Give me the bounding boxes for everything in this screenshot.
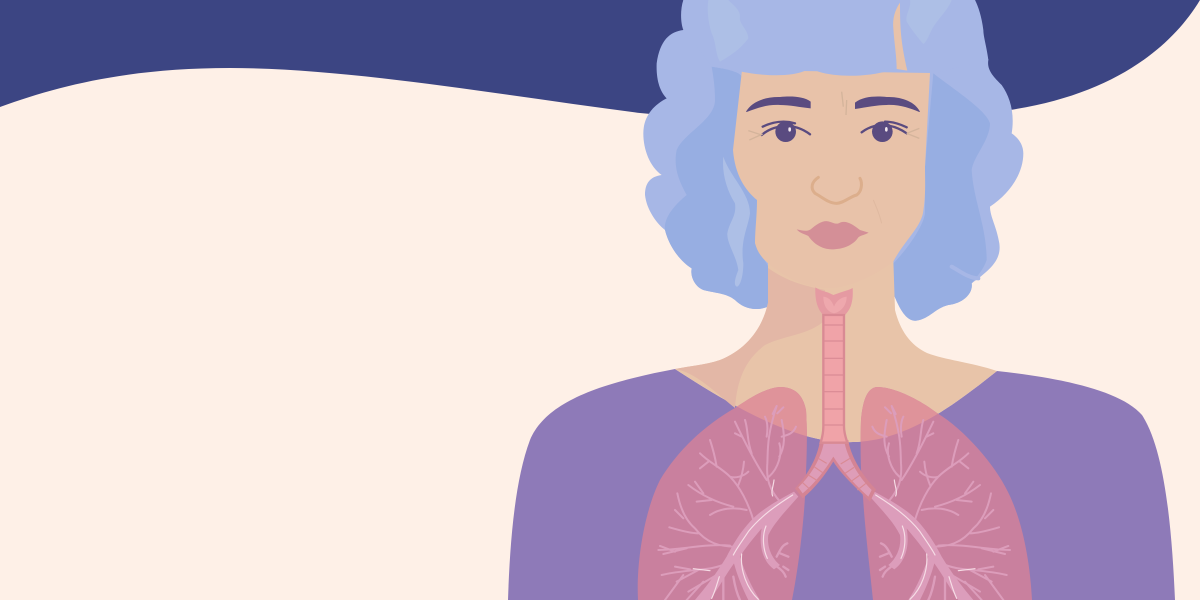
nose <box>812 177 861 203</box>
trachea and bronchi <box>795 287 876 502</box>
neck shadow <box>675 268 825 408</box>
larynx <box>815 287 853 315</box>
face <box>733 70 930 288</box>
hair: darker right wave <box>893 73 990 321</box>
lungs upper tone over skin <box>738 387 938 442</box>
eyebrows <box>746 96 920 112</box>
neck and chest <box>675 250 997 442</box>
lips <box>797 221 869 249</box>
facial features and bangs <box>683 0 988 249</box>
bronchial tree: right lung <box>870 406 1010 600</box>
shirt <box>508 369 1175 600</box>
trachea tube <box>821 315 847 443</box>
bronchial tree: left lung <box>658 406 798 600</box>
hair: bangs <box>683 0 988 76</box>
hair: darker left wave <box>665 67 768 309</box>
carina and main bronchi <box>795 440 876 502</box>
eyes <box>748 92 919 142</box>
hair: left streak <box>723 157 750 287</box>
hair: base and waves <box>643 0 1023 321</box>
hair: top highlights <box>708 0 952 62</box>
figure: woman <box>508 0 1175 600</box>
cheek wrinkles <box>873 200 882 223</box>
tracheal rings <box>803 325 866 490</box>
lungs <box>638 387 1032 600</box>
navy wave banner <box>0 0 1200 122</box>
hair parting <box>893 3 907 71</box>
hair: right streak <box>952 267 978 278</box>
